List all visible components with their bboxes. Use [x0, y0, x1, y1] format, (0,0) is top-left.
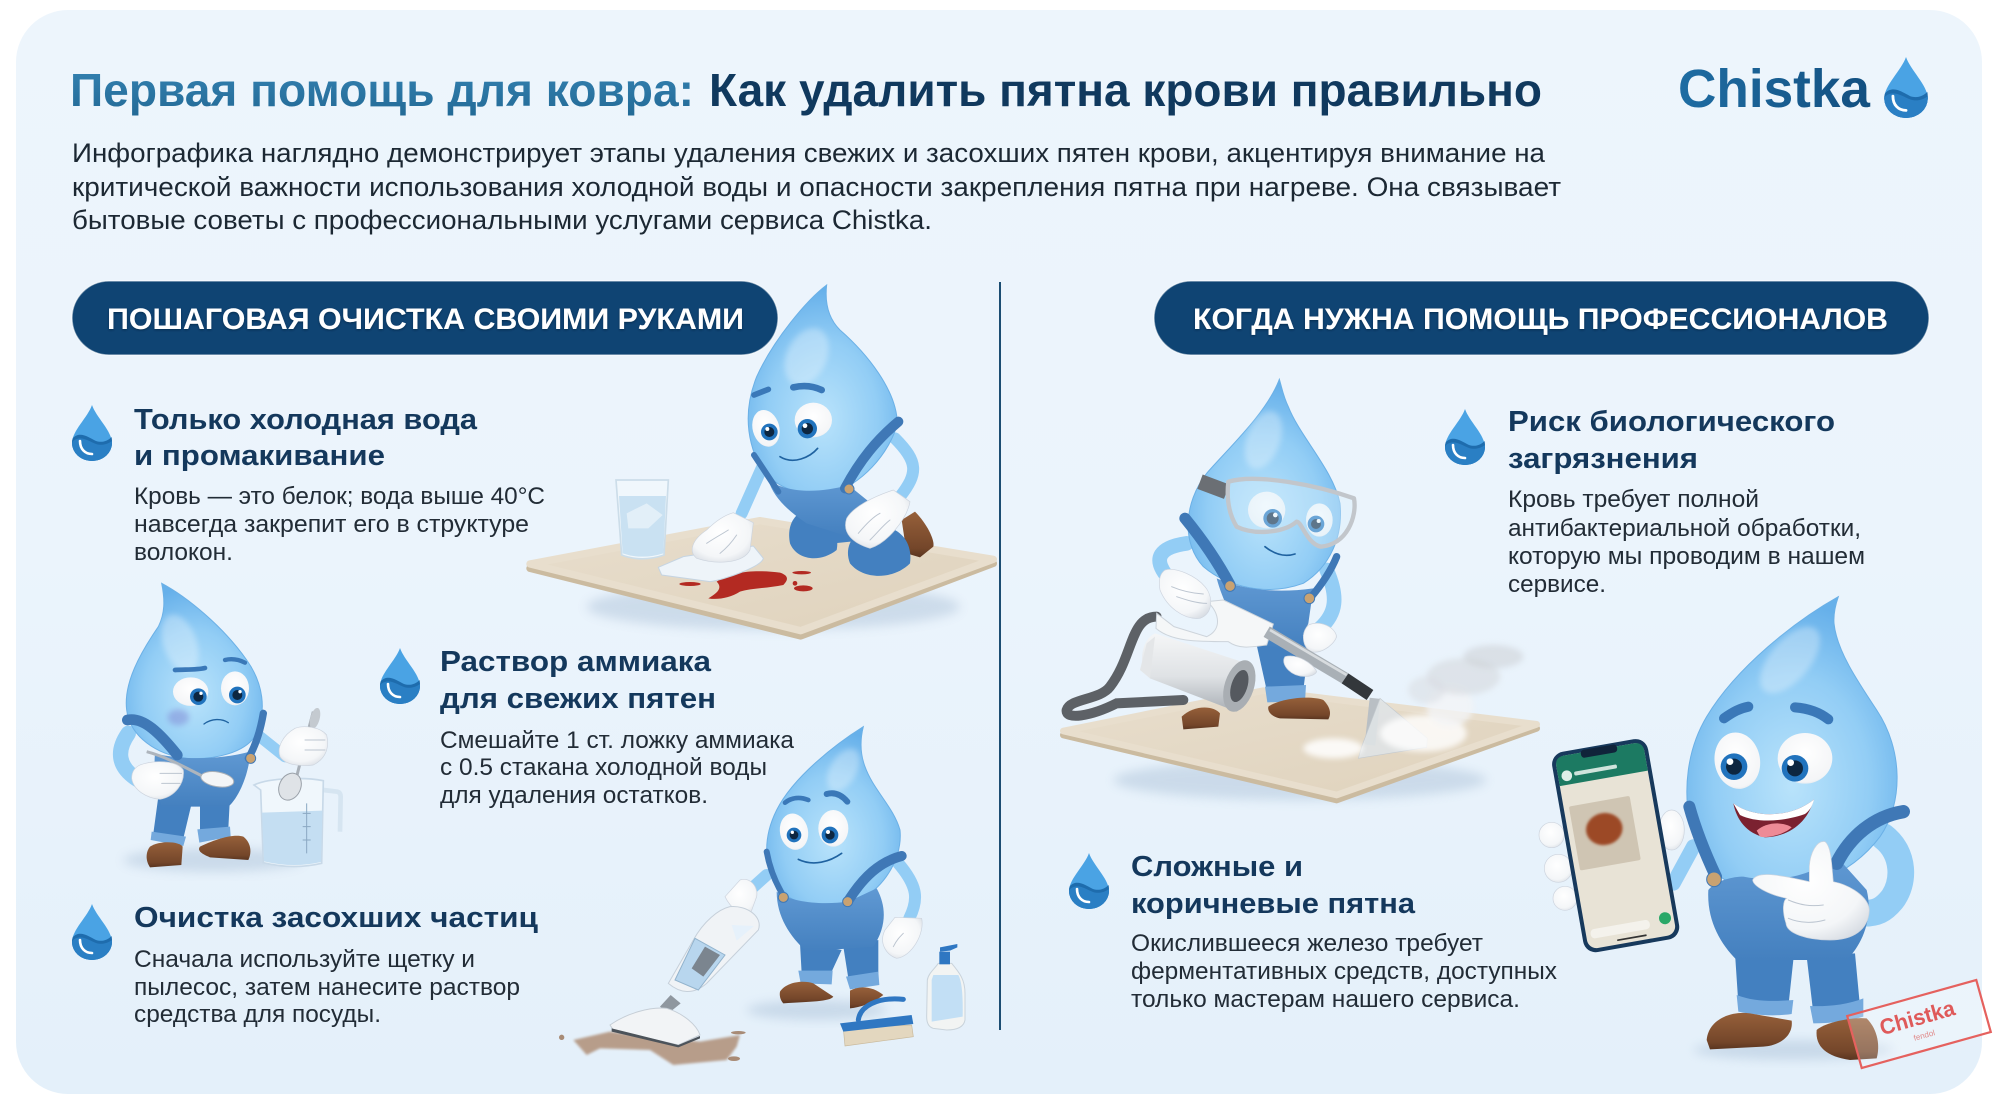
lower glove [1284, 656, 1317, 676]
title: Первая помощь для ковра: [70, 64, 694, 116]
mascot 4: professional steam extractor [1063, 379, 1537, 800]
step: cold water: волокон. [134, 539, 233, 566]
legs [1182, 630, 1330, 729]
risk: complex brown stains: ферментативных средств, доступных [1131, 958, 1557, 985]
risk: biological contamination: загрязнения [1508, 443, 1698, 475]
step: ammonia solution [380, 646, 795, 809]
risk: complex brown stains: коричневые пятна [1131, 888, 1416, 920]
arms [1160, 543, 1334, 628]
step: cold water [72, 404, 545, 566]
pointing glove [1753, 842, 1869, 940]
arms [742, 438, 913, 513]
title [70, 64, 1542, 116]
overalls [1217, 578, 1313, 650]
face [1248, 492, 1333, 555]
face [776, 793, 848, 863]
step: dried particles: средства для посуды. [134, 1001, 381, 1028]
step: cold water: Кровь — это белок; вода выше 40°C [134, 483, 545, 510]
logo: Chistka [1678, 59, 1871, 119]
step: ammonia solution: для свежих пятен [440, 683, 716, 715]
section header: professionals: КОГДА НУЖНА ПОМОЩЬ ПРОФЕССИОНАЛОВ [1193, 303, 1888, 336]
knees and shoe [789, 503, 934, 576]
risk: complex brown stains: Сложные и [1131, 851, 1303, 883]
spoon in jug [274, 707, 322, 804]
step: cold water: и промакивание [134, 440, 385, 472]
wand and nozzle [1267, 630, 1427, 758]
step: ammonia solution: Раствор аммиака [440, 646, 712, 678]
detergent bottle [927, 944, 965, 1030]
step: ammonia solution: с 0.5 стакана холодной воды [440, 754, 767, 781]
icon: water drop [380, 648, 420, 704]
risk: biological contamination: которую мы проводим в нашем [1508, 543, 1865, 570]
face [1710, 707, 1832, 837]
step: dried particles: Очистка засохших частиц [134, 902, 538, 934]
intro text: бытовые советы с профессиональными услугами сервиса Chistka. [72, 205, 932, 235]
carpet [530, 524, 993, 636]
cordless vacuum [610, 907, 759, 1047]
section header: DIY: ПОШАГОВАЯ ОЧИСТКА СВОИМИ РУКАМИ [107, 303, 744, 336]
drop body [767, 727, 900, 905]
intro text: Инфографика наглядно демонстрирует этапы удаления свежих и засохших пятен крови, акцентируя внимание на [72, 138, 1546, 168]
drop body [1188, 379, 1341, 589]
overalls [1708, 857, 1869, 960]
step: cold water: навсегда закрепит его в структуре [134, 511, 529, 538]
hand behind phone [1539, 810, 1684, 910]
overalls [155, 752, 250, 807]
lower glove [1303, 623, 1337, 652]
mascot 2: mixing ammonia solution [121, 583, 341, 872]
title: Как удалить пятна крови правильно [709, 64, 1542, 116]
overalls [777, 888, 884, 952]
scrub brush [840, 999, 913, 1046]
gloves [725, 879, 922, 958]
stamp: Chistka [1877, 995, 1958, 1040]
icon: water drop [1069, 853, 1109, 909]
risk: complex brown stains [1069, 851, 1557, 1013]
dirt [559, 1031, 746, 1065]
upper glove [1159, 569, 1211, 618]
risk: biological contamination: Кровь требует полной [1508, 486, 1759, 513]
spoon with powder [147, 752, 235, 789]
stamp [1847, 980, 1991, 1068]
far arm [1863, 837, 1901, 913]
carpet [1063, 694, 1537, 800]
overalls [768, 480, 875, 537]
intro text [72, 138, 1561, 235]
risk: complex brown stains: Окислившееся железо требует [1131, 930, 1483, 957]
legs [147, 797, 250, 867]
mascot 1: blotting blood on carpet [530, 285, 993, 636]
extractor machine [1140, 600, 1273, 716]
measuring jug [254, 779, 341, 867]
drop body [126, 583, 262, 759]
goggles [1200, 479, 1355, 547]
right glove [279, 727, 328, 766]
face [748, 386, 832, 460]
risk: biological contamination: Риск биологического [1508, 406, 1835, 438]
icon: water drop [72, 405, 112, 461]
hose [1067, 617, 1183, 716]
step: ammonia solution: Смешайте 1 ст. ложку аммиака [440, 727, 795, 754]
step: ammonia solution: для удаления остатков. [440, 782, 708, 809]
legs [780, 940, 883, 1008]
section header: DIY [72, 281, 778, 355]
icon: water drop [1445, 409, 1485, 465]
risk: complex brown stains: только мастерам нашего сервиса. [1131, 986, 1520, 1013]
stain [679, 571, 813, 599]
left glove [132, 762, 184, 799]
steam [1303, 645, 1523, 758]
icon: water drop [72, 904, 112, 960]
phone [1550, 737, 1681, 954]
risk: biological contamination: антибактериальной обработки, [1508, 515, 1861, 542]
face [168, 659, 249, 725]
section header: professionals [1154, 281, 1929, 355]
drop body [748, 285, 897, 494]
stamp: fendol [1913, 1028, 1936, 1043]
step: dried particles: пылесос, затем нанесите раствор [134, 974, 520, 1001]
cloth [658, 546, 763, 582]
arms [121, 733, 138, 780]
risk: biological contamination [1445, 406, 1865, 598]
glass of water [616, 480, 668, 559]
legs [1707, 953, 1878, 1060]
mascot 3: vacuuming dried particles [559, 727, 965, 1065]
step: dried particles [72, 902, 538, 1028]
arms [750, 863, 915, 918]
gloves [692, 490, 910, 562]
step: dried particles: Сначала используйте щетку и [134, 946, 475, 973]
risk: biological contamination: сервисе. [1508, 571, 1606, 598]
step: cold water: Только холодная вода [134, 404, 478, 436]
mascot 5: phone and thumbs-up [1539, 597, 1903, 1060]
drop body [1687, 597, 1897, 891]
intro text: критической важности использования холодной воды и опасности закрепления пятна при нагреве. Она связывает [72, 172, 1561, 202]
